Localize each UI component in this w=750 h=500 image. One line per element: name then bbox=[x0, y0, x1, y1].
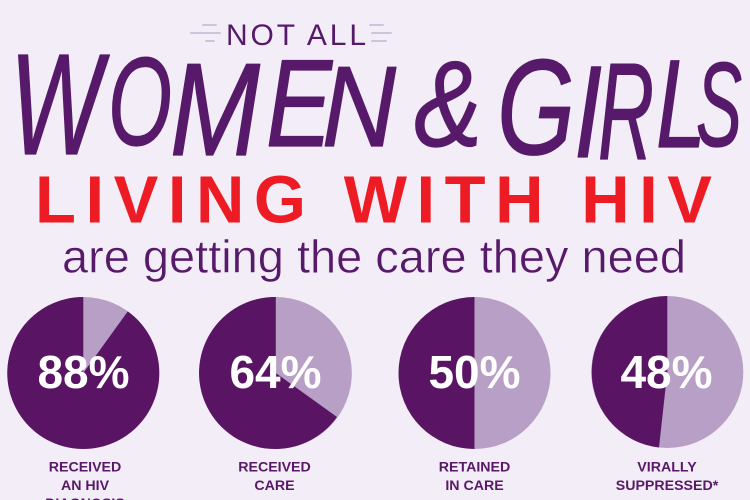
heading: women and girls brush lettering: R bbox=[598, 35, 654, 189]
heading: women and girls brush lettering bbox=[10, 24, 742, 189]
heading: not all: NOT ALL bbox=[226, 19, 366, 52]
heading: women and girls brush lettering: I bbox=[574, 38, 602, 185]
pie chart: retained in care 50% bbox=[398, 297, 550, 449]
pie chart: received care 64%: 64% bbox=[229, 346, 322, 398]
label: retained in care: IN CARE bbox=[445, 478, 504, 494]
subheading: are getting the care they need bbox=[62, 231, 686, 283]
heading: women and girls brush lettering: N bbox=[322, 44, 397, 171]
pie chart: retained in care 50%: 50% bbox=[428, 346, 521, 398]
heading: women and girls brush lettering: G bbox=[497, 31, 575, 183]
label: received an hiv diagnosis: RECEIVED bbox=[49, 460, 121, 476]
heading: women and girls brush lettering: L bbox=[656, 35, 706, 174]
heading: women and girls brush lettering: M bbox=[170, 36, 260, 183]
label: virally suppressed: VIRALLY bbox=[637, 460, 697, 476]
label: received care: CARE bbox=[254, 478, 295, 494]
heading: women and girls brush lettering: W bbox=[10, 24, 110, 185]
pie chart: received diagnosis 88%: 88% bbox=[37, 346, 130, 398]
label: received an hiv diagnosis: AN HIV bbox=[61, 478, 110, 494]
label: retained in care: RETAINED bbox=[439, 460, 510, 476]
heading: women and girls brush lettering: O bbox=[108, 33, 172, 172]
pie chart: virally suppressed 48% bbox=[591, 296, 743, 448]
pie chart: virally suppressed 48%: 48% bbox=[620, 346, 713, 398]
heading: living with hiv: LIVING WITH HIV bbox=[35, 162, 712, 238]
heading: women and girls brush lettering: E bbox=[266, 35, 333, 173]
pie chart: received diagnosis 88% bbox=[7, 297, 159, 449]
heading: women and girls brush lettering: & bbox=[414, 36, 482, 172]
label: virally suppressed: SUPPRESSED* bbox=[616, 478, 719, 494]
pie chart: received care 64% bbox=[199, 297, 352, 449]
label: received care: RECEIVED bbox=[238, 460, 311, 476]
